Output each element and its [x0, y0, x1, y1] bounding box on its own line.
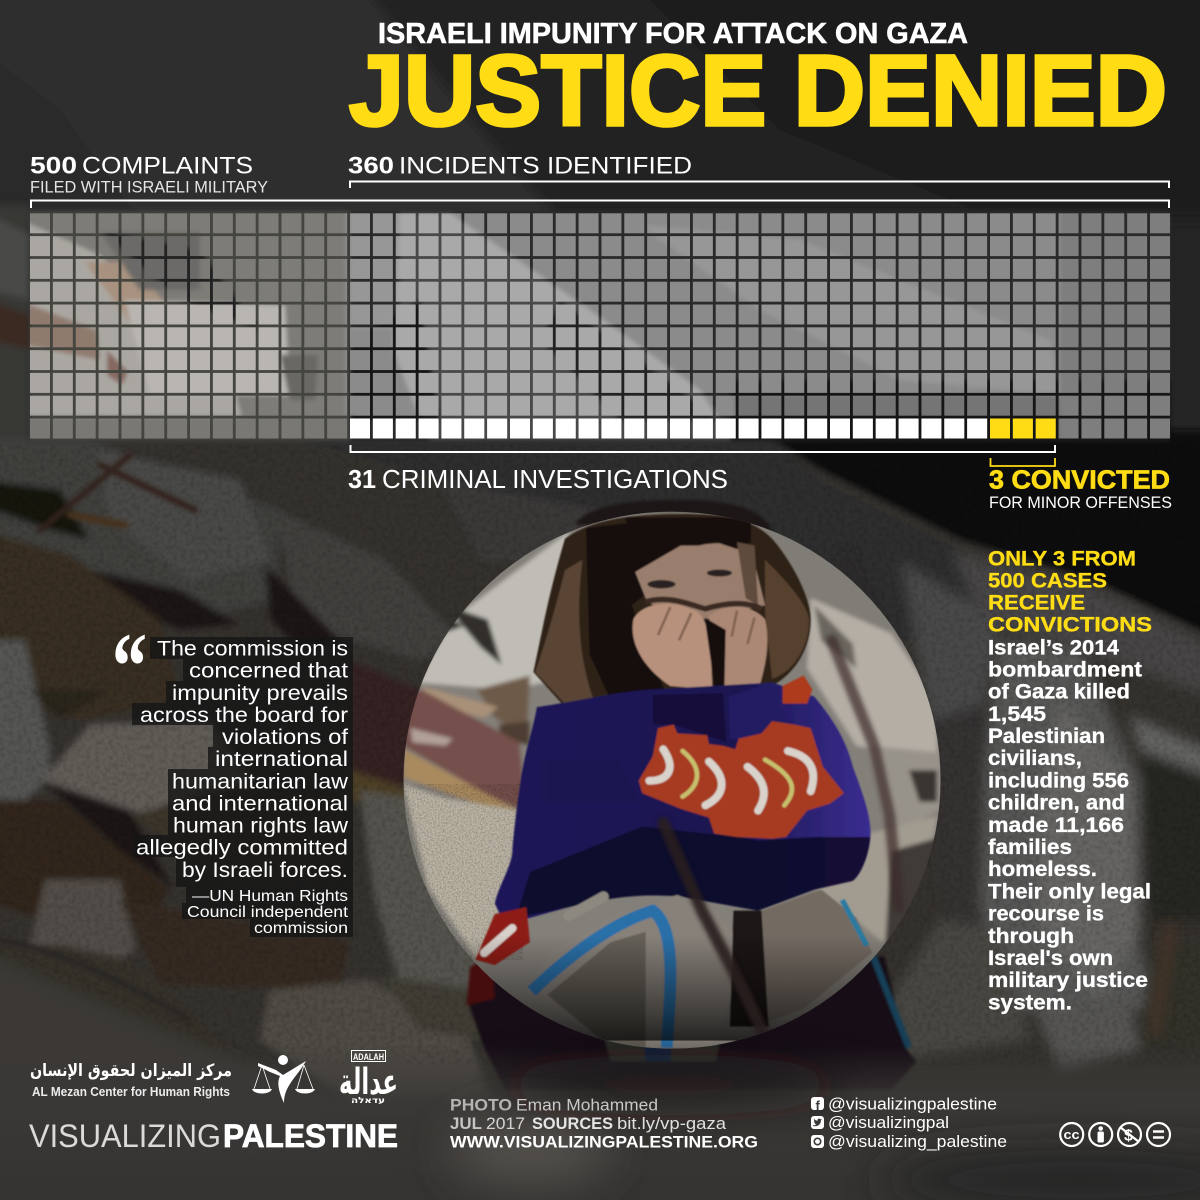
label: 3 convicted: 3 CONVICTED: [989, 464, 1170, 494]
Visualizing Palestine wordmark: [29, 1118, 398, 1154]
icon: no derivatives: [1147, 1123, 1170, 1146]
bracket: 360 incidents: [350, 182, 1169, 188]
credits: 2017: [486, 1114, 525, 1133]
sweater: [495, 683, 871, 925]
yellow heading: RECEIVE: [988, 591, 1085, 615]
quote block: commission: [254, 920, 348, 937]
blue stripes on trousers: [532, 911, 670, 1048]
translucent cells showing the photo: [25, 208, 1175, 444]
rubble on the right: [890, 550, 1200, 1070]
social handles: @visualizingpal: [828, 1113, 949, 1132]
credits: bit.ly/vp-gaza: [617, 1114, 727, 1133]
credits: JUL: [450, 1114, 482, 1133]
yellow heading: 500 CASES: [988, 568, 1107, 592]
the girl: [475, 514, 872, 1048]
quote block: violations of: [222, 726, 348, 749]
credits: WWW.VISUALIZINGPALESTINE.ORG: [450, 1132, 758, 1152]
quote block: The commission is: [157, 638, 348, 660]
face: [635, 542, 765, 619]
icon: instagram: [811, 1135, 824, 1148]
credits: PHOTO: [450, 1096, 512, 1114]
fists: [633, 604, 712, 690]
body paragraph: [988, 636, 1151, 1014]
label: 500 complaints: COMPLAINTS: [82, 152, 253, 180]
quote block: Council independent: [187, 904, 349, 921]
body paragraph: Palestinian: [988, 724, 1105, 748]
label: 31 criminal investigations: 31: [348, 464, 376, 494]
upper dark rock area: [0, 0, 1200, 220]
label: 360 incidents: 360: [348, 152, 394, 180]
hair: [533, 514, 811, 709]
quote block: humanitarian law: [172, 770, 349, 793]
body paragraph: system.: [988, 990, 1072, 1014]
quote block: allegedly committed: [136, 837, 348, 860]
rubble inside circle: [400, 511, 948, 1051]
credits: [450, 1096, 758, 1152]
quote block: —UN Human Rights: [192, 888, 348, 905]
Visualizing Palestine wordmark: PALESTINE: [223, 1118, 398, 1154]
body paragraph: families: [988, 835, 1072, 859]
quote block: international: [215, 748, 348, 771]
icon: attribution: [1089, 1123, 1112, 1146]
lower sleeve: [475, 907, 530, 965]
blurred twigs over photo: [663, 640, 898, 1037]
social handles: @visualizing_palestine: [828, 1132, 1007, 1151]
body paragraph: recourse is: [988, 902, 1104, 926]
label: 500 complaints: [30, 152, 268, 196]
icon: Adalah logo: עדאלה: [351, 1096, 385, 1106]
quote block: by Israeli forces.: [182, 859, 348, 882]
Visualizing Palestine wordmark: VISUALIZING: [29, 1118, 221, 1154]
quote block: [112, 613, 353, 937]
credits: SOURCES: [532, 1114, 613, 1133]
social handles: @visualizingpalestine: [828, 1094, 997, 1114]
quote block: and international: [172, 792, 348, 815]
icon: cc: cc: [1064, 1127, 1080, 1142]
label: 500 complaints: 500: [30, 152, 77, 180]
edge of photo left of the grid: [0, 205, 30, 445]
trousers: [526, 895, 742, 1048]
bracket: 3 convicted: [990, 458, 1055, 466]
yellow heading: CONVICTIONS: [988, 613, 1152, 637]
label: 3 convicted: FOR MINOR OFFENSES: [989, 493, 1172, 512]
body paragraph: children, and: [988, 791, 1125, 815]
body paragraph: Their only legal: [988, 879, 1151, 903]
icon: Adalah logo: [339, 1050, 398, 1106]
right text block: [988, 546, 1152, 1014]
Al Mezan wordmark: مركز الميزان لحقوق الإنسان: [30, 1061, 232, 1081]
quote highlight bars: [132, 637, 353, 937]
quote block: across the board for: [140, 704, 348, 727]
rusted rebar in rubble: [0, 455, 195, 1020]
Al Mezan wordmark: AL Mezan Center for Human Rights: [32, 1085, 230, 1099]
icon: Al Mezan scales logo: [252, 1055, 315, 1103]
credits: Eman Mohammed: [516, 1096, 658, 1114]
body paragraph: homeless.: [988, 857, 1097, 881]
label: 3 convicted: [989, 464, 1172, 512]
photo circle: girl sitting in the rubble: [400, 511, 948, 1051]
white cells: criminal investigations: [350, 418, 987, 438]
red sweater pattern: [639, 721, 844, 839]
bracket: 500 complaints: [31, 200, 1169, 208]
quote block: human rights law: [173, 815, 349, 838]
body paragraph: including 556: [988, 768, 1129, 792]
body paragraph: 1,545: [988, 702, 1046, 726]
grid backing showing through the gaps: [30, 211, 1170, 441]
icon: twitter: [811, 1116, 824, 1129]
subtitle: ISRAELI IMPUNITY FOR ATTACK ON GAZA: [378, 18, 968, 50]
icon: facebook: f: [816, 1098, 820, 1113]
rubble: [0, 430, 1200, 1200]
body paragraph: Israel's own: [988, 946, 1113, 970]
label: 500 complaints: FILED WITH ISRAELI MILITARY: [30, 178, 268, 196]
creative commons icons: [1060, 1123, 1170, 1146]
icon: facebook: [811, 1097, 824, 1113]
bottom fog: [0, 950, 1200, 1200]
quote block: impunity prevails: [172, 682, 348, 705]
icon: Adalah logo: ADALAH: [353, 1052, 384, 1063]
yellow cells: convictions: [990, 418, 1056, 438]
label: 360 incidents: INCIDENTS IDENTIFIED: [399, 152, 692, 180]
girl's legs and hair beyond the circle: [467, 500, 916, 1090]
Al Mezan wordmark: [30, 1061, 232, 1099]
title: JUSTICE DENIED: [349, 35, 1167, 147]
blurred foreground twigs: [845, 560, 1170, 1030]
icon: Adalah logo: عدالة: [339, 1062, 398, 1103]
label: 31 criminal investigations: CRIMINAL INVESTIGATIONS: [382, 464, 728, 494]
quote block: concerned that: [189, 660, 348, 683]
body paragraph: Israel’s 2014: [988, 636, 1119, 660]
social handles: [811, 1094, 1007, 1151]
body paragraph: made 11,166: [988, 813, 1124, 837]
body paragraph: through: [988, 924, 1074, 948]
icon: non-commercial: $: [1124, 1128, 1133, 1144]
white moons: [649, 749, 813, 811]
bracket: 31 investigations: [350, 445, 1055, 452]
body paragraph: of Gaza killed: [988, 680, 1130, 704]
yellow heading: [988, 546, 1152, 637]
body paragraph: civilians,: [988, 746, 1082, 770]
quotation mark: “: [112, 613, 147, 719]
waffle grid: 500 complaints: [25, 208, 1175, 444]
yellow heading: ONLY 3 FROM: [988, 546, 1136, 570]
body paragraph: military justice: [988, 968, 1148, 992]
body paragraph: bombardment: [988, 658, 1142, 682]
